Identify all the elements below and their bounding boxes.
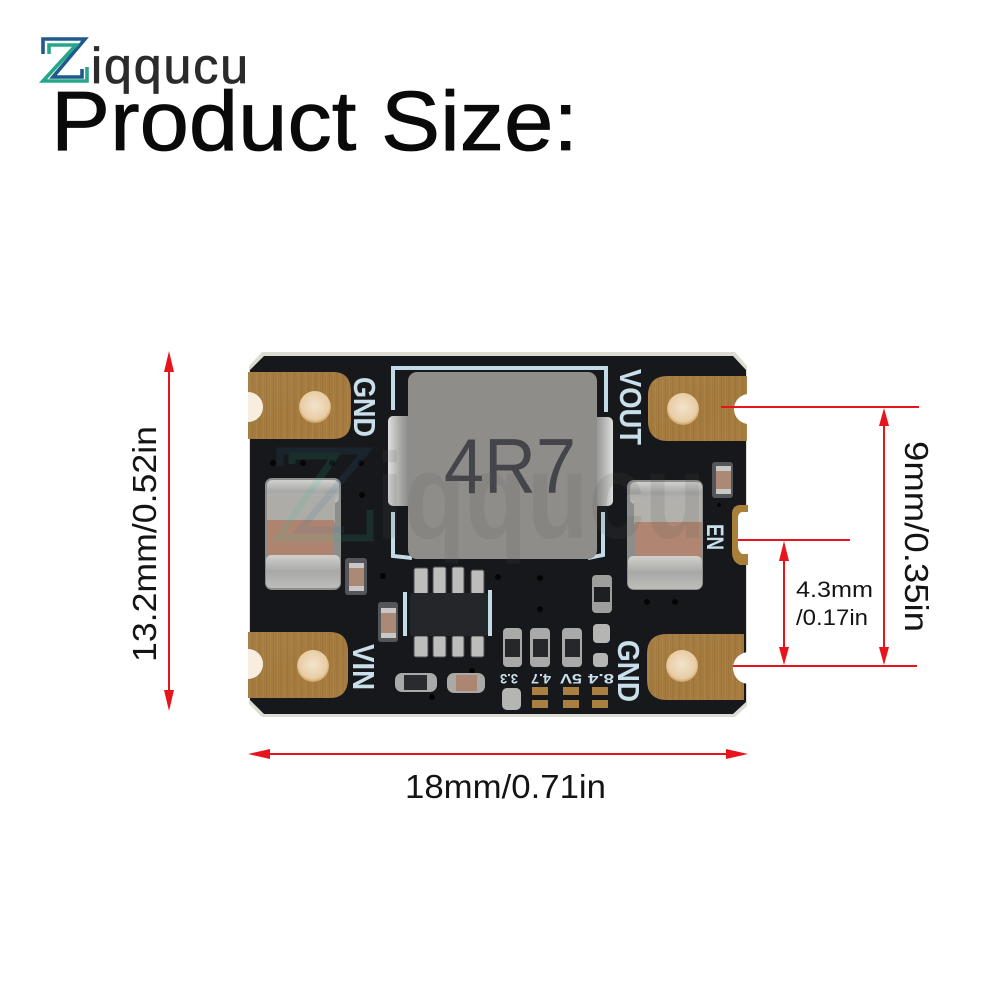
chip pins [414, 567, 484, 657]
inductor leads [388, 416, 412, 506]
notch: top right [734, 394, 749, 424]
capacitor: right [627, 480, 703, 590]
brand name: iqqucu [91, 38, 248, 94]
spacing label 9mm: 9mm/0.35in [898, 441, 935, 632]
chip body [410, 593, 488, 636]
watermark [278, 428, 706, 564]
label: voltage options: 8.4 [588, 671, 614, 687]
label: GND bottom right: GND [611, 640, 646, 702]
module: PCB photo [248, 352, 749, 717]
brand logo [43, 38, 248, 94]
label: voltage options: 4.7 [531, 671, 551, 687]
label: VIN: VIN [346, 644, 381, 690]
pad: EN edge [732, 505, 748, 565]
width arrow [248, 749, 748, 759]
title: Product Size: [51, 74, 578, 168]
gold test pads [532, 687, 608, 708]
label: voltage options: 3.3 [500, 671, 518, 687]
label: voltage options [500, 671, 614, 687]
chip silkscreen [405, 590, 490, 636]
board edge [249, 352, 747, 717]
spacing label 4.3mm: 4.3mm [796, 577, 873, 602]
capacitor: near chip [378, 602, 398, 642]
pad: bottom left [248, 632, 348, 698]
silkscreen labels [346, 369, 728, 702]
solder blobs [502, 624, 610, 710]
width label: 18mm/0.71in [405, 768, 606, 805]
inductor [388, 372, 613, 559]
chip: SOT package [405, 567, 490, 657]
spacing arrow 9mm [879, 408, 889, 665]
spacing guides [721, 406, 919, 667]
inductor body [408, 372, 597, 559]
capacitor: horizontal [447, 673, 485, 693]
via holes [270, 460, 721, 700]
pad: top left [248, 372, 351, 439]
watermark text: iqqucu [376, 428, 706, 564]
resistor: horizontal [395, 673, 437, 692]
spacing arrow 4.3mm [779, 541, 789, 665]
capacitor: small top right [712, 462, 733, 498]
watermark logo [278, 451, 370, 538]
pad: top right [648, 376, 749, 441]
notch: bottom right [733, 652, 749, 684]
capacitor: small left [345, 558, 367, 595]
dimension: width [248, 749, 748, 805]
resistors: voltage select [503, 575, 612, 667]
spacing label 4.3mm: /0.17in [796, 605, 868, 630]
height label: 13.2mm/0.52in [126, 426, 163, 662]
dimension: height [126, 351, 174, 711]
icon: Z logo mark [43, 39, 87, 81]
label: EN: EN [701, 524, 728, 550]
board surface [250, 356, 746, 714]
spacing label 4.3mm [796, 577, 873, 630]
label: GND top left: GND [347, 377, 382, 437]
silkscreen: inductor outline [393, 368, 606, 558]
label: VOUT: VOUT [613, 369, 648, 445]
dimension: pad spacing [721, 406, 935, 667]
inductor marking: 4R7 [444, 422, 576, 510]
height arrow [164, 351, 174, 711]
label: voltage options: 5V [559, 671, 582, 687]
capacitor: left [265, 478, 341, 590]
pad: bottom right [647, 634, 749, 700]
